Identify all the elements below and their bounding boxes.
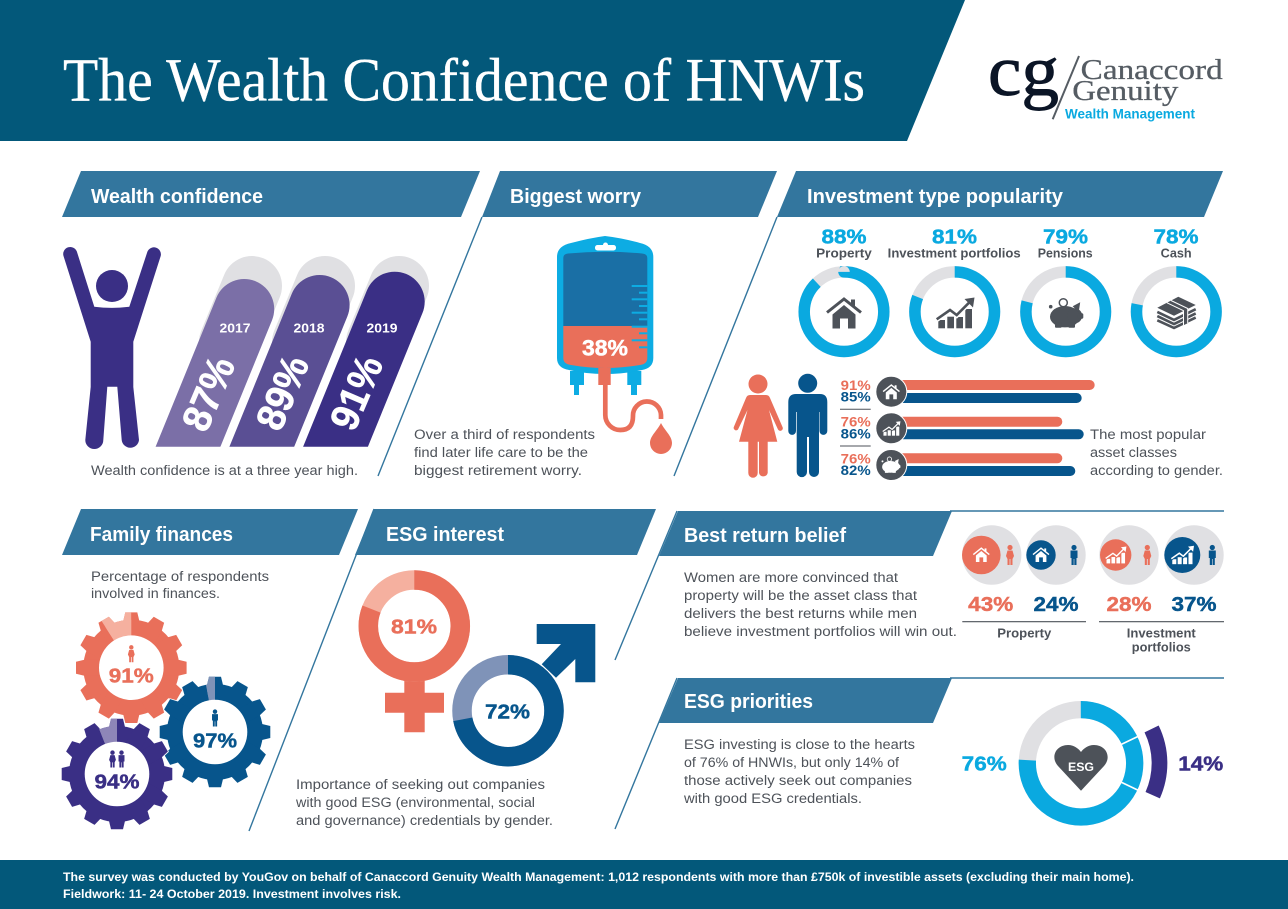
stat: property by gender: 43% bbox=[968, 593, 1013, 616]
header banner bbox=[0, 0, 965, 141]
heading: best return belief bbox=[659, 511, 952, 556]
donut: cash 78%: Cash bbox=[1161, 247, 1192, 261]
chart: yearly confidence bars: 2017 bbox=[220, 321, 250, 336]
gear: men 97%: 97% bbox=[193, 730, 237, 752]
donut: cash 78% bbox=[1136, 226, 1216, 352]
chart: yearly confidence bars: 2019 bbox=[366, 321, 398, 336]
donut: property 88% bbox=[804, 226, 884, 352]
panel: biggest worry bbox=[414, 171, 777, 478]
stat: investment portfolios by gender: 37% bbox=[1172, 593, 1216, 616]
chart: ESG donut 76% and 14%: 14% bbox=[1178, 753, 1223, 776]
gear: all respondents 94% bbox=[62, 719, 172, 829]
footer bbox=[0, 860, 1288, 909]
heading: family finances bbox=[62, 509, 358, 555]
stat: property by gender: Property bbox=[997, 627, 1051, 641]
logo: Canaccord Genuity Wealth Management: Wealth Management bbox=[1065, 106, 1195, 121]
logo: Canaccord Genuity Wealth Management: cg bbox=[988, 31, 1059, 111]
caption: Wealth confidence is at a three year high. bbox=[91, 463, 358, 478]
heading: wealth confidence: Wealth confidence bbox=[91, 186, 263, 208]
text: biggest worry description bbox=[414, 427, 595, 478]
chart: yearly confidence bars: 2018 bbox=[294, 321, 324, 336]
heading: investment type popularity bbox=[777, 171, 1223, 217]
text: best return description: believe investment portfolios will win out. bbox=[684, 624, 957, 639]
text: biggest worry description: find later life care to be the bbox=[414, 445, 588, 460]
text: gender caption: according to gender. bbox=[1090, 463, 1223, 478]
chart: gender bars bbox=[840, 376, 1095, 480]
text: ESG priorities description: with good ESG credentials. bbox=[683, 791, 862, 806]
donut: investment portfolios 81%: Investment portfolios bbox=[888, 247, 1021, 261]
chart: yearly confidence bars: 89% bbox=[248, 349, 318, 437]
text: best return description: delivers the best returns while men bbox=[684, 606, 917, 621]
chart: gender bars: 86% bbox=[841, 425, 871, 441]
heading: best return belief: Best return belief bbox=[684, 525, 846, 547]
icon: person with raised arms bbox=[63, 247, 161, 449]
icon: male symbol 72% bbox=[462, 624, 595, 757]
icon: female symbol 81%: 81% bbox=[391, 615, 437, 638]
stat: investment portfolios by gender: Investment bbox=[1127, 627, 1197, 641]
heading: investment type popularity: Investment type popularity bbox=[807, 186, 1064, 208]
chart: yearly confidence bars: 87% bbox=[174, 350, 244, 438]
text: ESG priorities description: of 76% of HNWIs, but only 14% of bbox=[684, 755, 899, 770]
text: gender caption: asset classes bbox=[1090, 445, 1177, 460]
gear: women 91% bbox=[76, 612, 187, 723]
chart: yearly confidence bars bbox=[174, 286, 399, 471]
heading: ESG interest: ESG interest bbox=[386, 524, 504, 546]
donut: investment portfolios 81%: 81% bbox=[932, 226, 977, 248]
icon: man bbox=[788, 374, 827, 477]
text: ESG priorities description: those actively seek out companies bbox=[684, 773, 912, 788]
text: family finances description: involved in finances. bbox=[91, 586, 220, 601]
stat: property by gender bbox=[962, 525, 1086, 641]
text: biggest worry description: biggest retirement worry. bbox=[414, 463, 582, 478]
donut: investment portfolios 81% bbox=[888, 226, 1021, 352]
text: ESG interest description: with good ESG (environmental, social bbox=[295, 795, 535, 810]
stat: investment portfolios by gender: 28% bbox=[1106, 593, 1152, 616]
chart: gender bars: 91% bbox=[841, 377, 871, 393]
text: family finances description: Percentage of respondents bbox=[91, 569, 269, 584]
icon: drip bag 38%: 38% bbox=[582, 336, 628, 360]
chart: yearly confidence bars: 91% bbox=[322, 349, 392, 437]
donut: pensions 79%: Pensions bbox=[1038, 247, 1093, 261]
heading: ESG priorities bbox=[659, 678, 952, 723]
heading: biggest worry: Biggest worry bbox=[510, 186, 642, 208]
stat: investment portfolios by gender: portfolios bbox=[1132, 641, 1191, 655]
chart: gender bars: 82% bbox=[841, 462, 871, 478]
logo: Canaccord Genuity Wealth Management: Genuity bbox=[1072, 76, 1178, 107]
logo: Canaccord Genuity Wealth Management: Canaccord bbox=[1081, 55, 1223, 86]
logo: Canaccord Genuity Wealth Management bbox=[988, 31, 1223, 121]
icon: male symbol 72%: 72% bbox=[485, 700, 530, 723]
gear: all respondents 94%: 94% bbox=[94, 770, 140, 794]
text: ESG interest description: Importance of seeking out companies bbox=[296, 777, 545, 792]
chart: gender bars: 76% bbox=[841, 414, 871, 430]
text: best return description bbox=[684, 570, 957, 639]
stat: property by gender: 24% bbox=[1034, 593, 1078, 616]
heading: biggest worry bbox=[482, 171, 777, 217]
gear: women 91%: 91% bbox=[109, 665, 154, 688]
title: The Wealth Confidence of HNWIs bbox=[63, 48, 865, 114]
panel: ESG interest bbox=[295, 509, 656, 828]
heading: ESG priorities: ESG priorities bbox=[684, 691, 813, 713]
panel: family finances bbox=[62, 509, 358, 829]
text: ESG interest description bbox=[295, 777, 553, 828]
text: best return description: Women are more convinced that bbox=[684, 570, 898, 585]
text: gender caption: The most popular bbox=[1090, 427, 1207, 442]
chart: ESG donut 76% and 14%: 76% bbox=[962, 753, 1007, 776]
stat: investment portfolios by gender bbox=[1099, 525, 1224, 655]
chart: ESG donut 76% and 14% bbox=[962, 710, 1223, 817]
text: biggest worry description: Over a third of respondents bbox=[414, 427, 595, 442]
chart: gender bars: 76% bbox=[841, 450, 871, 466]
footer: Fieldwork: 11- 24 October 2019. Investment involves risk. bbox=[63, 887, 401, 901]
donut: pensions 79%: 79% bbox=[1043, 226, 1088, 248]
panel: investment type popularity bbox=[734, 171, 1223, 480]
icon: woman bbox=[734, 374, 783, 478]
chart: gender bars: 85% bbox=[841, 389, 871, 405]
panel: wealth confidence bbox=[62, 171, 480, 478]
donut: property 88%: Property bbox=[816, 247, 872, 261]
text: ESG priorities description: ESG investing is close to the hearts bbox=[684, 737, 915, 752]
footer: The survey was conducted by YouGov on behalf of Canaccord Genuity Wealth Management: 1,012 respondents with more than £750k of investible assets (excluding their main home). bbox=[63, 870, 1134, 884]
text: gender caption bbox=[1090, 427, 1223, 478]
icon: female symbol 81% bbox=[368, 580, 460, 732]
chart: ESG donut 76% and 14%: ESG bbox=[1068, 760, 1094, 774]
heading: ESG interest bbox=[355, 509, 656, 555]
donut: cash 78%: 78% bbox=[1154, 226, 1198, 248]
text: ESG interest description: and governance) credentials by gender. bbox=[296, 813, 553, 828]
icon: drip bag 38% bbox=[557, 236, 672, 454]
panel: ESG priorities bbox=[659, 678, 1223, 817]
donut: property 88%: 88% bbox=[822, 226, 866, 248]
heading: wealth confidence bbox=[62, 171, 480, 217]
panel: best return belief bbox=[659, 511, 1224, 655]
text: family finances description bbox=[91, 569, 269, 601]
donut: pensions 79% bbox=[1026, 226, 1106, 352]
heading: family finances: Family finances bbox=[90, 524, 233, 546]
text: ESG priorities description bbox=[683, 737, 915, 806]
gear: men 97% bbox=[160, 677, 270, 787]
text: best return description: property will be the asset class that bbox=[684, 588, 917, 603]
